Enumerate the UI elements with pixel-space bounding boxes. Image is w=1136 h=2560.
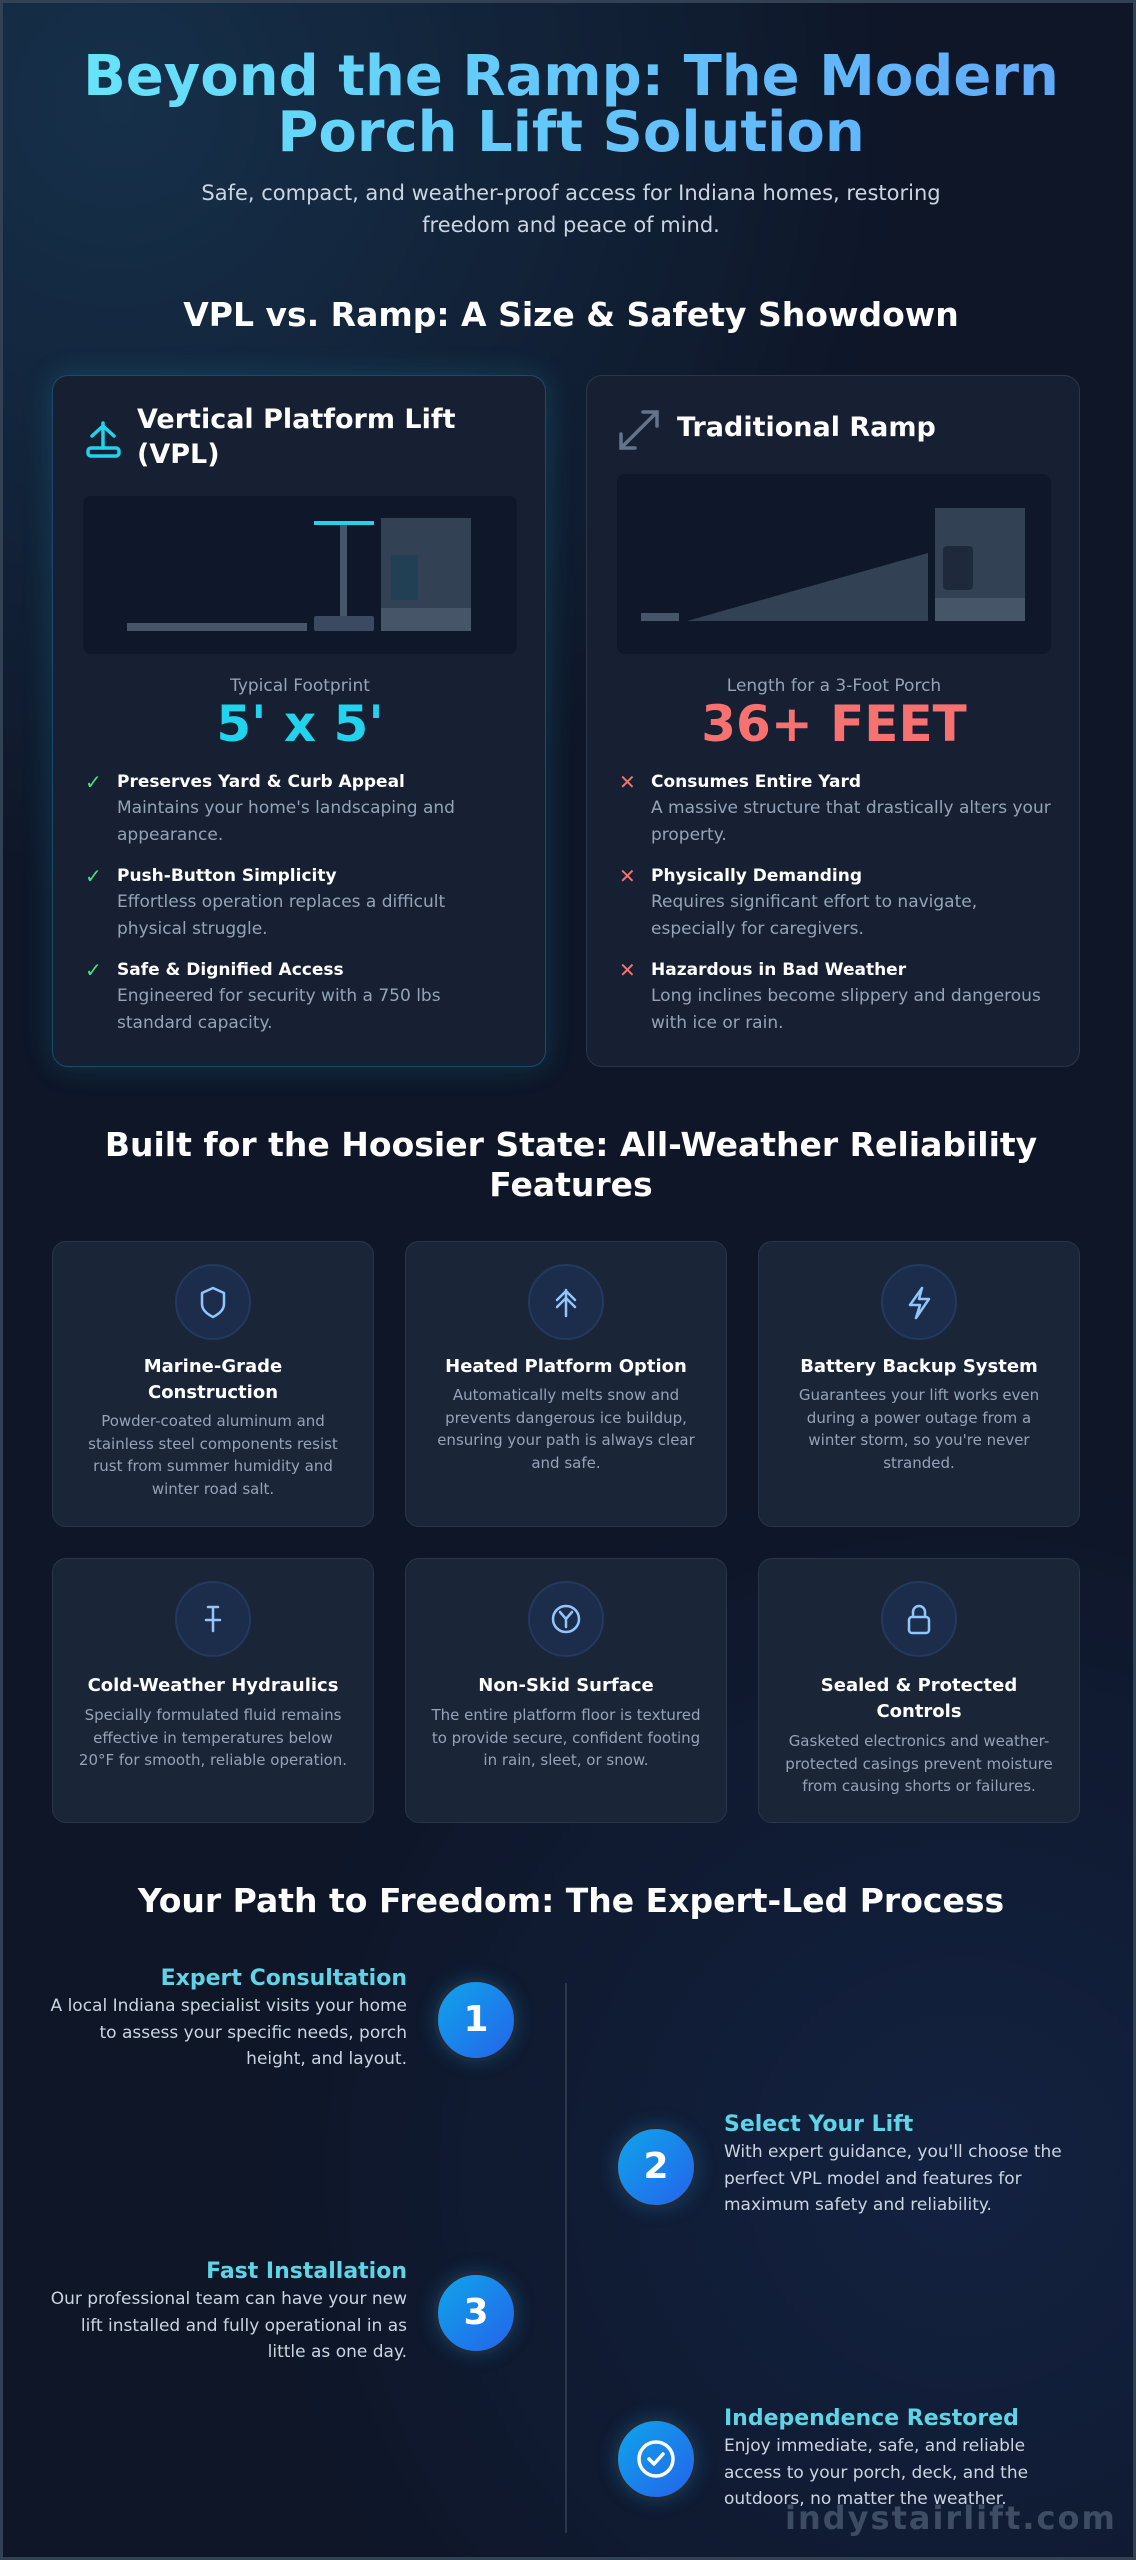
step 2 text (724, 2112, 1062, 2215)
drawback 2: Physically Demanding (651, 866, 862, 886)
feature text: ensuring your path is always clear (437, 1431, 695, 1449)
feature text: effective in temperatures below (93, 1728, 333, 1746)
step 2 text: perfect VPL model and features for (724, 2168, 1022, 2188)
panel title: Traditional Ramp (677, 412, 936, 443)
drawback 3: Long inclines become slippery and dangerous (651, 986, 1041, 1006)
feature title (821, 1675, 1017, 1722)
heading: VPL vs Ramp: VPL vs. Ramp: A Size & Safety Showdown (183, 295, 959, 334)
step 3 text: lift installed and fully operational in as (81, 2316, 407, 2336)
step 2 badge: 2 (643, 2146, 669, 2187)
drawback 1: Consumes Entire Yard (651, 772, 861, 792)
drawback 1 (619, 770, 1051, 845)
feature card: marine-grade (52, 1241, 374, 1527)
feature text: during a power outage from a (807, 1408, 1031, 1426)
step 4 text: Independence Restored (724, 2406, 1019, 2431)
heading: all-weather features: Built for the Hoosier State: All-Weather Reliability (105, 1125, 1037, 1164)
step 2 text: With expert guidance, you'll choose the (724, 2142, 1062, 2162)
icon: shield (175, 1264, 251, 1340)
benefit 1: Preserves Yard & Curb Appeal (117, 772, 405, 792)
stat: ramp length: 36+ FEET (701, 695, 967, 753)
panel: vertical platform lift: ✓ (85, 864, 102, 888)
step 1 text: height, and layout. (246, 2049, 407, 2069)
feature text: stranded. (883, 1454, 955, 1472)
feature text: prevents dangerous ice buildup, (445, 1408, 687, 1426)
feature text: from causing shorts or failures. (802, 1777, 1036, 1795)
step 1 text (50, 1966, 407, 2069)
feature title: Heated Platform Option (445, 1356, 687, 1377)
feature text (431, 1706, 700, 1769)
feature text: The entire platform floor is textured (432, 1706, 700, 1724)
feature text (88, 1412, 338, 1498)
subtitle (201, 181, 941, 237)
stat: footprint: 5' x 5' (216, 695, 384, 753)
step 4 (608, 2406, 1028, 2509)
benefit 2: Effortless operation replaces a difficult physical struggle. (117, 892, 445, 939)
icon: circle Y (528, 1581, 604, 1657)
step 2 text: maximum safety and reliability. (724, 2195, 992, 2215)
step 3 text (51, 2259, 407, 2362)
panel: traditional ramp (586, 375, 1080, 1067)
feature text: protected casings prevent moisture (785, 1754, 1053, 1772)
step 2 (608, 2112, 1062, 2216)
feature text: to provide secure, confident footing (432, 1728, 700, 1746)
step 3 badge: 3 (463, 2292, 489, 2333)
title: Porch Lift Solution (277, 100, 865, 165)
drawback 1: property. (651, 825, 727, 845)
step 4 text (724, 2406, 1028, 2509)
feature text (785, 1732, 1053, 1795)
step 1 badge: 1 (463, 1999, 489, 2040)
panel: traditional ramp: ✕ (619, 958, 636, 982)
feature text: winter storm, so you're never (808, 1431, 1030, 1449)
feature text: Guarantees your lift works even (799, 1386, 1039, 1404)
step 4 badge: check (614, 2417, 698, 2501)
feature text: stainless steel components resist (88, 1434, 338, 1452)
drawback 1: A massive structure that drastically alters your (651, 798, 1051, 818)
step 1 text: A local Indiana specialist visits your home (51, 1996, 407, 2016)
feature title: Battery Backup System (800, 1356, 1038, 1377)
watermark: indystairlift.com (785, 2499, 1117, 2537)
step 3 text: Fast Installation (206, 2259, 407, 2284)
step 2 text: Select Your Lift (724, 2112, 913, 2137)
subtitle: Safe, compact, and weather-proof access for Indiana homes, restoring (201, 181, 941, 205)
drawback 2 (619, 864, 977, 939)
benefit 3: Engineered for security with a 750 lbs standard capacity. (117, 986, 441, 1033)
title: Beyond the Ramp: The Modern (83, 44, 1059, 109)
benefit 1 (85, 770, 455, 845)
feature text: winter road salt. (152, 1480, 274, 1498)
step 3 text: little as one day. (268, 2342, 407, 2362)
feature text (799, 1386, 1039, 1472)
stat: footprint: Typical Footprint (230, 676, 370, 696)
list: ramp drawbacks (619, 770, 1051, 1033)
panel title: (VPL) (137, 439, 220, 470)
icon: arrow up (528, 1264, 604, 1340)
feature card: battery backup (758, 1241, 1080, 1527)
panel: vertical platform lift (52, 375, 546, 1067)
step 4 text: outdoors, no matter the weather. (724, 2489, 1007, 2509)
feature card: non-skid (405, 1558, 727, 1823)
panel title: Vertical Platform Lift (137, 404, 456, 435)
step 4 text: Enjoy immediate, safe, and reliable (724, 2436, 1025, 2456)
feature text: and safe. (531, 1454, 601, 1472)
feature text (79, 1706, 347, 1769)
panel: traditional ramp: ✕ (619, 864, 636, 888)
step 3 text: Our professional team can have your new (51, 2289, 407, 2309)
feature text: Powder-coated aluminum and (101, 1412, 325, 1430)
panel: vertical platform lift: ✓ (85, 770, 102, 794)
feature card: sealed controls (758, 1558, 1080, 1823)
timeline line (565, 1983, 567, 2533)
benefit 3: Safe & Dignified Access (117, 960, 344, 980)
heading: process: Your Path to Freedom: The Expert-Led Process (138, 1881, 1004, 1920)
icon: lightning (881, 1264, 957, 1340)
feature title: Non-Skid Surface (478, 1675, 654, 1696)
heading: all-weather features (105, 1125, 1037, 1204)
feature text: in rain, sleet, or snow. (483, 1751, 649, 1769)
panel title (137, 404, 456, 470)
drawback 3: Hazardous in Bad Weather (651, 960, 906, 980)
feature card: heated platform (405, 1241, 727, 1527)
drawback 2: Requires significant effort to navigate, (651, 892, 977, 912)
feature text: Specially formulated fluid remains (85, 1706, 341, 1724)
feature text: Gasketed electronics and weather- (789, 1732, 1049, 1750)
feature title (144, 1356, 282, 1403)
feature title: Marine-Grade (144, 1356, 282, 1377)
feature text: Automatically melts snow and (453, 1386, 679, 1404)
step 1 text: to assess your specific needs, porch (99, 2022, 407, 2042)
drawback 2: especially for caregivers. (651, 919, 864, 939)
list: VPL benefits (85, 770, 455, 1033)
benefit 3 (85, 958, 441, 1033)
title (3, 49, 1136, 161)
step 1 text: Expert Consultation (161, 1966, 407, 1991)
feature text: 20°F for smooth, reliable operation. (79, 1751, 347, 1769)
stat: ramp length: Length for a 3-Foot Porch (727, 676, 941, 696)
drawback 3: with ice or rain. (651, 1013, 784, 1033)
subtitle: freedom and peace of mind. (422, 213, 720, 237)
step 4 text: access to your porch, deck, and the (724, 2462, 1028, 2482)
feature title: Construction (148, 1382, 278, 1403)
illustration: long ramp (617, 474, 1051, 654)
benefit 2 (85, 864, 445, 939)
feature title: Controls (876, 1701, 962, 1722)
step 3 badge (434, 2271, 518, 2355)
illustration: lift next to house (83, 496, 517, 654)
feature title: Cold-Weather Hydraulics (88, 1675, 338, 1696)
panel: traditional ramp: ✕ (619, 770, 636, 794)
feature text: rust from summer humidity and (93, 1457, 333, 1475)
benefit 2: Push-Button Simplicity (117, 866, 337, 886)
icon: lock (881, 1581, 957, 1657)
benefit 1: Maintains your home's landscaping and appearance. (117, 798, 455, 845)
feature card: hydraulics (52, 1558, 374, 1823)
step 1 badge (434, 1978, 518, 2062)
icon: lift (86, 421, 121, 458)
feature title: Sealed & Protected (821, 1675, 1017, 1696)
feature text (437, 1386, 695, 1472)
step 3 (51, 2259, 524, 2362)
step 2 badge (614, 2125, 698, 2209)
icon: expand arrows (619, 410, 659, 450)
step 1 (50, 1966, 524, 2069)
icon: hydraulic (175, 1581, 251, 1657)
panel: vertical platform lift: ✓ (85, 958, 102, 982)
heading: all-weather features: Features (489, 1165, 653, 1204)
drawback 3 (619, 958, 1041, 1033)
